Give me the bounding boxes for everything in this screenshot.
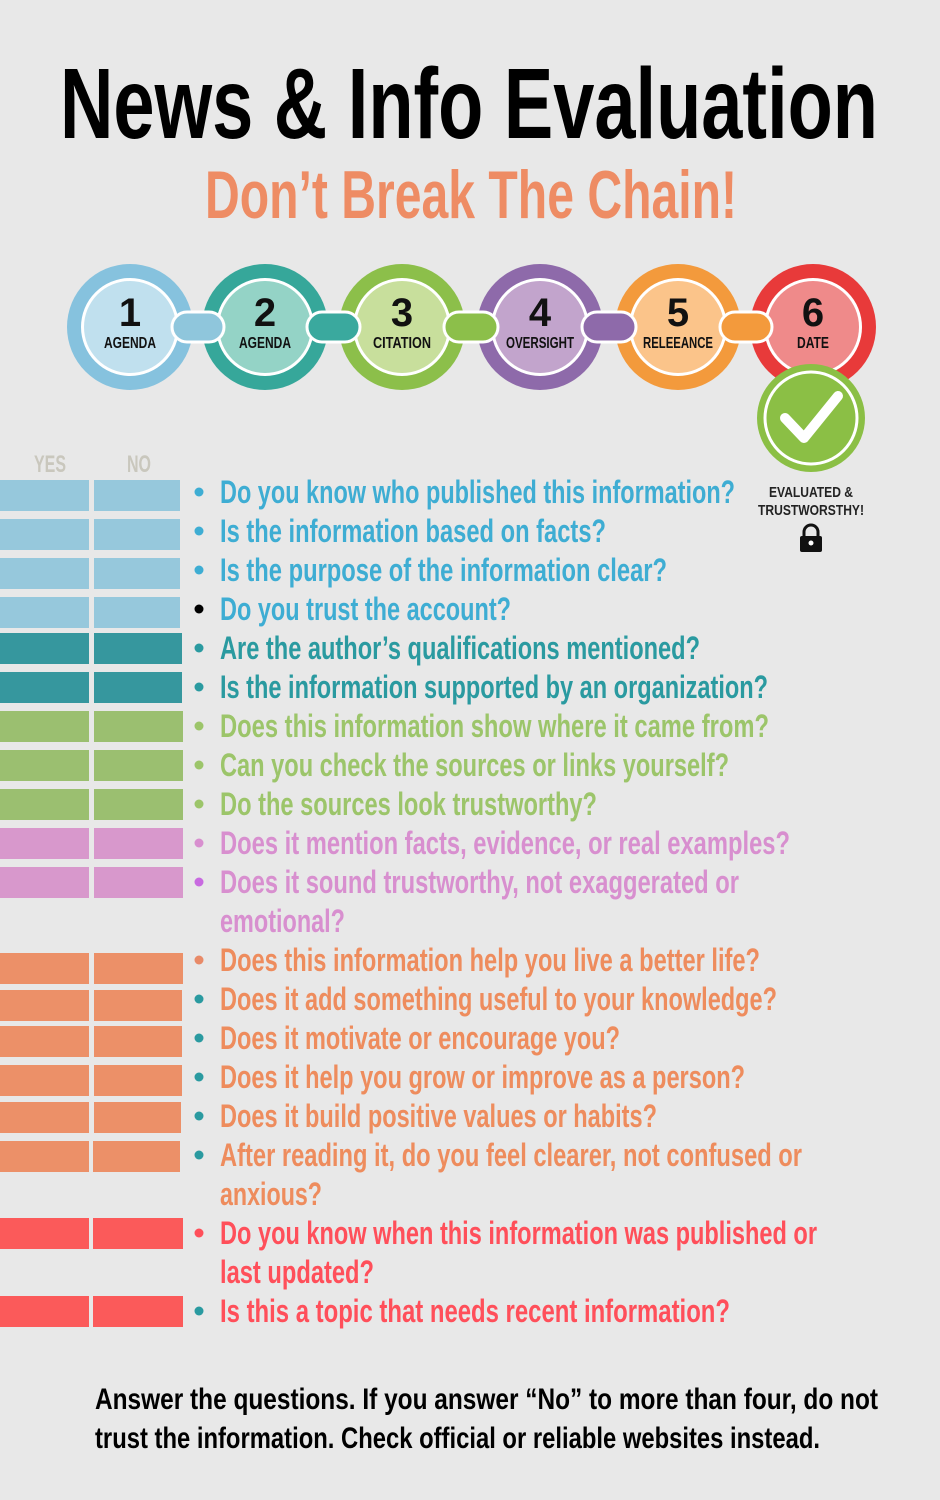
step 4 [477,264,603,390]
yes no headers: YES [34,451,66,478]
questions list: Does it motivate or encourage you? [220,1020,620,1056]
step labels: 5 [667,291,689,335]
questions list: emotional? [220,903,345,939]
questions list: Does it build positive values or habits? [220,1098,657,1134]
questions list: Does it help you grow or improve as a person? [220,1059,745,1095]
questions list: Does this information help you live a better life? [220,942,760,978]
connectors [172,312,772,342]
yes no headers: NO [127,451,151,478]
questions list: Is this a topic that needs recent information? [220,1293,730,1329]
step labels: 2 [254,291,276,335]
questions list [194,474,817,1329]
footer note [95,1383,878,1455]
step 3 [339,264,465,390]
step 6 [750,264,876,390]
step 5 [615,264,741,390]
icon: lock [800,525,822,552]
evaluated label: EVALUATED & [769,484,853,501]
step labels: OVERSIGHT [506,335,574,352]
questions list: Is the purpose of the information clear? [220,552,667,588]
questions list: last updated? [220,1254,374,1290]
step 2 [202,264,328,390]
questions list: Is the information based on facts? [220,513,606,549]
questions list: Do you know who published this information? [220,474,735,510]
answer grid [0,480,183,1327]
questions list: Are the author’s qualifications mentioned? [220,630,700,666]
step labels: 3 [391,291,413,335]
questions list: Does it sound trustworthy, not exaggerated or [220,864,739,900]
step 1 [67,264,193,390]
questions list: anxious? [220,1176,322,1212]
evaluated label [758,484,864,519]
step labels: RELEEANCE [643,335,713,352]
yes no headers [34,451,151,478]
step labels: 4 [529,291,552,335]
evaluated label: TRUSTWORSTHY! [758,502,864,519]
chain of steps [67,264,876,390]
step labels [104,291,829,352]
step labels: AGENDA [104,335,156,352]
questions list: Do the sources look trustworthy? [220,786,597,822]
questions list: Do you trust the account? [220,591,511,627]
step labels: CITATION [373,335,431,352]
step labels: 6 [802,291,824,335]
questions list: Can you check the sources or links yourself? [220,747,729,783]
step labels: 1 [119,291,141,335]
step labels: AGENDA [239,335,291,352]
questions list: Does this information show where it came from? [220,708,769,744]
subtitle: Don’t Break The Chain! [205,157,737,233]
icon: check [757,364,865,472]
step labels: DATE [797,335,829,352]
